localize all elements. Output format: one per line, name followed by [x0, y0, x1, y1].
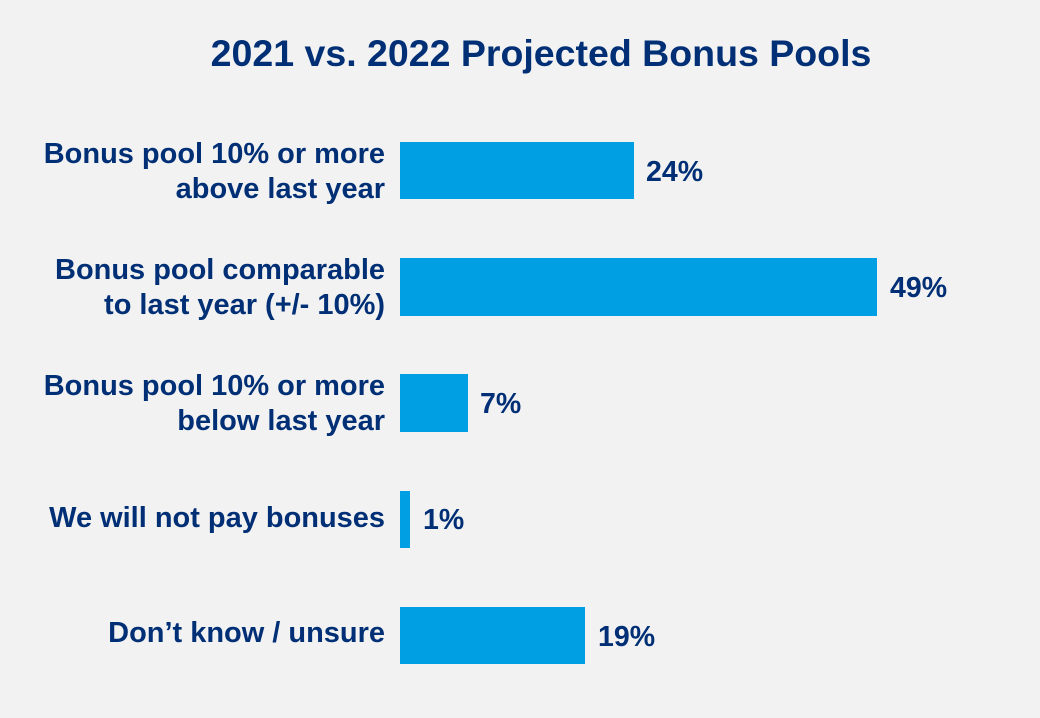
- category label: 10% or more above: [44, 138, 385, 205]
- bar: 24%: [400, 142, 634, 199]
- value: 24%: 24%: [646, 156, 703, 188]
- value: 19%: 19%: [598, 621, 655, 653]
- category label: comparable: to last year (+/- 10%): [104, 289, 385, 321]
- bar: 7%: [400, 374, 468, 432]
- bar chart: [44, 138, 947, 664]
- category label: 10% or more below: [44, 370, 385, 437]
- category label: 10% or more below: below last year: [177, 405, 385, 437]
- category label: 10% or more above: Bonus pool 10% or more: [44, 138, 385, 170]
- value: 49%: 49%: [890, 272, 947, 304]
- category label: 10% or more below: Bonus pool 10% or more: [44, 370, 385, 402]
- category label: comparable: Bonus pool comparable: [55, 254, 385, 286]
- bar: 49%: [400, 258, 877, 316]
- bar: 19%: [400, 607, 585, 664]
- title: 2021 vs. 2022 Projected Bonus Pools: [211, 32, 871, 74]
- category label: comparable: [55, 254, 385, 321]
- category label: 10% or more above: above last year: [176, 173, 385, 205]
- category label: unsure: Don’t know / unsure: [108, 617, 385, 649]
- bar: 1%: [400, 491, 410, 548]
- value: 1%: 1%: [423, 504, 464, 536]
- value: 7%: 7%: [480, 388, 521, 420]
- category label: no bonuses: We will not pay bonuses: [49, 502, 385, 534]
